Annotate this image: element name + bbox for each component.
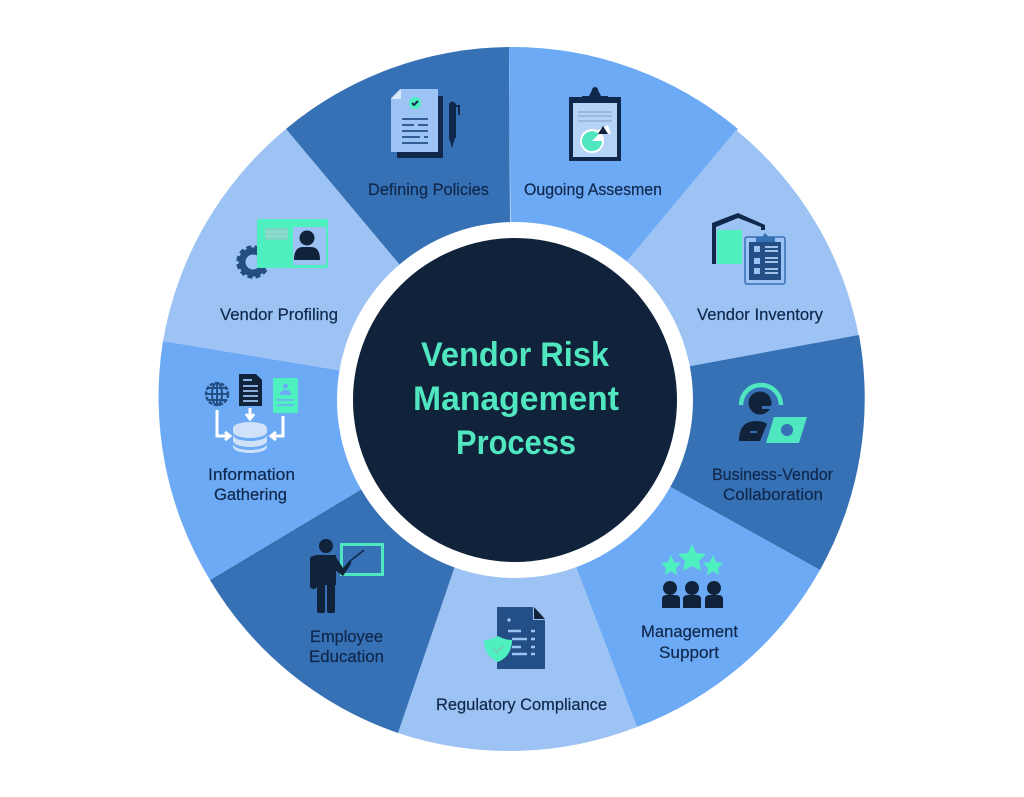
segment: information gathering bbox=[159, 341, 512, 580]
segment: vendor inventory bbox=[512, 130, 859, 399]
title: Process bbox=[456, 424, 576, 462]
icon: policy document and pen bbox=[391, 89, 459, 158]
label: ongoing assessment: Ougoing Assesmen bbox=[524, 180, 662, 199]
label: information gathering bbox=[208, 465, 295, 504]
label: information gathering: Information bbox=[208, 465, 295, 484]
icon: trainer at board bbox=[310, 539, 382, 613]
label: employee education bbox=[309, 627, 384, 666]
label: information gathering: Gathering bbox=[214, 485, 287, 504]
icon: data sources into database bbox=[206, 374, 298, 453]
icon: support agent with laptop bbox=[739, 385, 807, 443]
segment: management support bbox=[512, 399, 820, 727]
segment: ongoing assessment bbox=[509, 47, 738, 399]
segment: business-vendor collaboration bbox=[512, 335, 865, 570]
label: business-vendor collaboration bbox=[712, 465, 833, 504]
title: Vendor Risk bbox=[421, 336, 609, 374]
title bbox=[413, 336, 619, 462]
title: Management bbox=[413, 380, 619, 418]
icon: compliance document with shield bbox=[484, 607, 545, 669]
segment: employee education bbox=[210, 399, 512, 733]
icon: clipboard with pie chart bbox=[569, 87, 621, 161]
label: employee education: Education bbox=[309, 647, 384, 666]
label: management support: Management bbox=[641, 622, 738, 641]
label: management support bbox=[641, 622, 738, 662]
label: defining policies: Defining Policies bbox=[368, 180, 489, 199]
segment: defining policies bbox=[286, 47, 512, 399]
label: business-vendor collaboration: Business-Vendor bbox=[712, 465, 833, 484]
segment: vendor profiling bbox=[163, 129, 512, 399]
label: business-vendor collaboration: Collaboration bbox=[723, 485, 823, 504]
label: management support: Support bbox=[659, 643, 719, 662]
label: vendor inventory: Vendor Inventory bbox=[697, 305, 823, 324]
icon: warehouse with checklist bbox=[712, 213, 785, 284]
wheel segments bbox=[159, 47, 865, 751]
center hub bbox=[337, 222, 693, 578]
segment: regulatory compliance bbox=[398, 399, 637, 751]
label: employee education: Employee bbox=[310, 627, 383, 646]
icon: three people with stars bbox=[661, 544, 723, 608]
label: regulatory compliance: Regulatory Compliance bbox=[436, 695, 607, 714]
label: vendor profiling: Vendor Profiling bbox=[220, 305, 338, 324]
icon: profile card with gear bbox=[238, 219, 328, 277]
